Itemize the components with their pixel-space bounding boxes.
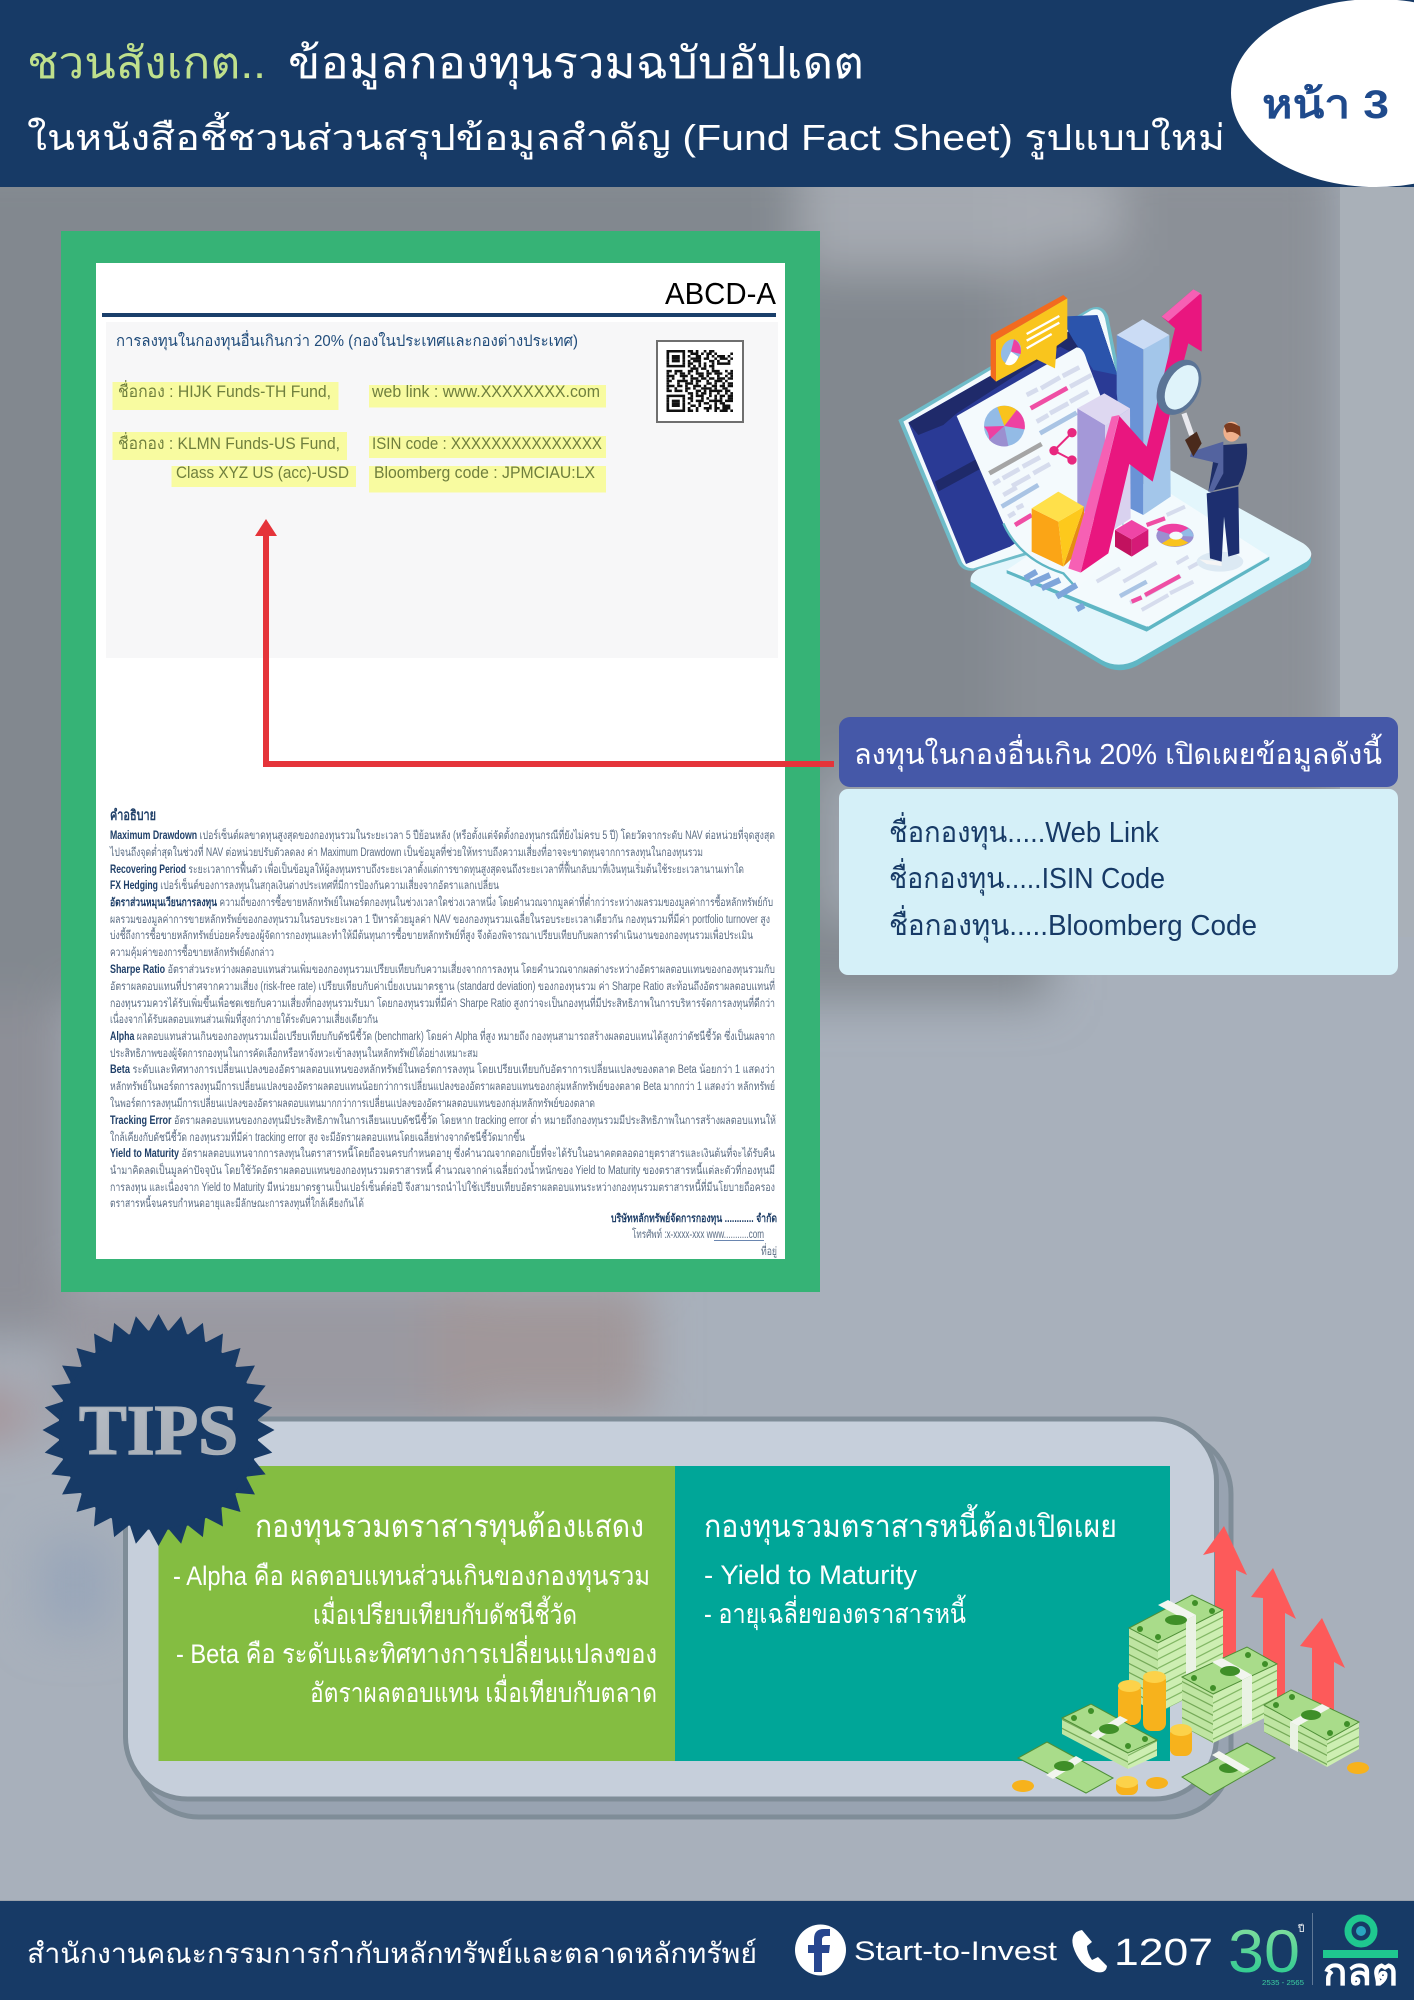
highlighted fund 2: Class XYZ US (acc)-USD	[176, 464, 349, 482]
glossary: portfolio turnover	[110, 894, 773, 959]
glossary heading: คำอธิบาย	[110, 807, 156, 824]
panel: debt funds: กองทุนรวมตราสารหนี้ต้องเปิดเผย	[704, 1504, 1117, 1546]
glossary: recovering period: Recovering Period ระยะเวลาการฟื้นตัว เพื่อเป็นข้อมูลให้ผู้ลงทุนทราบถึงระยะเวลาตั้งแต่การขาดทุนสูงสุดจนถึงระยะเวลาที่ฟื้นกลับมาที่เงินทุนเริ่มต้นใช้ระยะเวลานานเท่าใด	[110, 861, 744, 876]
header bar	[0, 0, 1414, 187]
callout: disclosure header: ลงทุนในกองอื่นเกิน 20% เปิดเผยข้อมูลดังนี้	[854, 733, 1382, 772]
disclosure heading: การลงทุนในกองทุนอื่นเกินกว่า 20% (กองในประเทศและกองต่างประเทศ)	[116, 330, 578, 351]
illustration: money and rising arrows	[1012, 1526, 1369, 1795]
icon: phone	[1072, 1930, 1107, 1972]
highlighted fund 1: ชื่อกอง : HIJK Funds-TH Fund,	[118, 380, 331, 401]
logo: 30 years: 30	[1228, 1918, 1300, 1985]
organisation name: สำนักงานคณะกรรมการกำกับหลักทรัพย์และตลาดหลักทรัพย์	[27, 1938, 757, 1969]
glossary: sharpe ratio: อัตราผลตอบแทนที่ปราศจากความเสี่ยง (risk-free rate) เปรียบเทียบกับค่าเบี่ยงเบนมาตรฐาน (standard deviation) ของกองทุนรวม ค่า Sharpe Ratio สะท้อนถึงอัตราผลตอบแทนที่	[110, 978, 775, 993]
blue bar	[1117, 319, 1171, 515]
yellow bar	[1032, 492, 1084, 567]
keyboard base	[971, 473, 1311, 670]
footer bar	[0, 1901, 1414, 2000]
title line 2: ในหนังสือชี้ชวนส่วนสรุปข้อมูลสำคัญ (Fund Fact Sheet) รูปแบบใหม่	[27, 111, 1225, 160]
curled report page	[957, 347, 1123, 588]
glossary: portfolio turnover: อัตราส่วนหมุนเวียนการลงทุน ความถี่ของการซื้อขายหลักทรัพย์ในพอร์ตกองทุนในช่วงเวลาใดช่วงเวลาหนึ่ง โดยคำนวณจากมูลค่าที่ต่ำกว่าระหว่างผลรวมของมูลค่าการซื้อหลักทรัพย์กับ	[110, 894, 773, 910]
sheet text lines	[1097, 507, 1207, 610]
panel: debt funds: - อายุเฉลี่ยของตราสารหนี้	[704, 1594, 966, 1631]
glossary: alpha: ประสิทธิภาพของผู้จัดการกองทุนในการคัดเลือกหรือหาจังหวะเข้าลงทุนในหลักทรัพย์ได้อย่างเหมาะสม	[110, 1046, 478, 1060]
glossary: portfolio turnover: ความคุ้มค่าของการซื้อขายหลักทรัพย์ดังกล่าว	[110, 944, 274, 959]
cash stack 3	[1264, 1690, 1359, 1767]
highlighted fund 2: ชื่อกอง : KLMN Funds-US Fund,	[118, 432, 340, 453]
title line 1	[27, 39, 864, 90]
highlighted fund 1	[112, 380, 606, 410]
panel: equity funds: อัตราผลตอบแทน เมื่อเทียบกับตลาด	[310, 1674, 657, 1708]
pink cube	[1115, 518, 1165, 557]
laptop screen	[898, 307, 1123, 571]
title line 1: ข้อมูลกองทุนรวมฉบับอัปเดต	[288, 39, 864, 90]
illustration: laptop with charts	[898, 289, 1311, 670]
coin stacks	[1118, 1671, 1166, 1731]
glossary: yield to maturity: การลงทุน และเนื่องจาก Yield to Maturity มีหน่วยมาตรฐานเป็นเปอร์เซ็นต์ต่อปี จึงสามารถนำไปใช้เปรียบเทียบอัตราผลตอบแทนระหว่างกองทุนรวมตราสารหนี้ที่มีนโยบายถือครอง	[110, 1179, 775, 1194]
fund code: ABCD-A	[665, 276, 776, 311]
keypad blocks	[1025, 572, 1084, 609]
businessman	[1185, 422, 1247, 572]
badge: TIPS starburst: TIPS	[79, 1392, 238, 1470]
logo: 30 years: ปี	[1297, 1923, 1304, 1935]
panel: other-fund disclosure	[106, 322, 778, 658]
document on keyboard	[1007, 557, 1269, 632]
glossary: beta	[110, 1061, 775, 1110]
glossary: maximum drawdown	[109, 827, 775, 859]
logo: SEC	[1323, 1918, 1398, 1994]
highlighted fund 2: Bloomberg code : JPMCIAU:LX	[374, 464, 595, 482]
callout: disclosure list: ชื่อกองทุน.....Web Link	[889, 812, 1159, 850]
highlighted fund 2	[112, 432, 606, 492]
hotline number: 1207	[1114, 1932, 1213, 1974]
badge: TIPS starburst	[42, 1314, 274, 1546]
glossary: yield to maturity: นำมาคิดลดเป็นมูลค่าปัจจุบัน โดยใช้วัดอัตราผลตอบแทนของกองทุนรวมตราสารหนี้ คำนวณจากค่าเฉลี่ยถ่วงน้ำหนักของ Yield to Maturity ของตราสารหนี้แต่ละตัวที่กองทุนมี	[110, 1162, 775, 1177]
panel: equity funds: - Alpha คือ ผลตอบแทนส่วนเกินของกองทุนรวม	[173, 1561, 650, 1593]
glossary: sharpe ratio	[110, 961, 775, 1026]
arrow: from callout up to disclosure	[255, 519, 834, 764]
speech bubble	[991, 295, 1067, 382]
company contact: ที่อยู่	[761, 1243, 777, 1258]
glossary: portfolio turnover: บ่งชี้ถึงการซื้อขายหลักทรัพย์บ่อยครั้งของผู้จัดการกองทุนและทำให้มีต้นทุนการซื้อขายหลักทรัพย์ที่สูง จึงต้องพิจารณาเปรียบเทียบกับผลการดำเนินงานของกองทุนรวมเพื่อประเมิน	[110, 927, 753, 942]
glossary: maximum drawdown: Maximum Drawdown เปอร์เซ็นต์ผลขาดทุนสูงสุดของกองทุนรวมในระยะเวลา 5 ปีย้อนหลัง (หรือตั้งแต่จัดตั้งกองทุนกรณีที่ยังไม่ครบ 5 ปี) โดยวัดจากระดับ NAV ต่อหน่วยที่จุดสูงสุด	[110, 827, 775, 842]
callout: disclosure header	[839, 717, 1398, 787]
logo: SEC: กลต	[1323, 1952, 1398, 1994]
red arrows	[1203, 1526, 1345, 1720]
network icon	[1054, 433, 1072, 460]
callout: disclosure list	[839, 789, 1398, 975]
panel: equity funds	[158, 1466, 676, 1761]
glossary: beta: Beta ระดับและทิศทางการเปลี่ยนแปลงของอัตราผลตอบแทนของหลักทรัพย์ในพอร์ตการลงทุน โดยเปรียบเทียบกับอัตราการเปลี่ยนแปลงของตลาด Beta น้อยกว่า 1 แสดงว่า	[110, 1061, 775, 1076]
flat bills	[1018, 1742, 1275, 1795]
facebook page name: Start-to-Invest	[854, 1936, 1058, 1966]
logo: 30 years: 2535 - 2565	[1262, 1980, 1304, 1987]
glossary: yield to maturity: ตราสารหนี้จนครบกำหนดอายุและมีลักษณะการลงทุนที่ใกล้เคียงกันได้	[110, 1195, 364, 1210]
donut chart	[1156, 524, 1194, 547]
loose coins	[1012, 1724, 1369, 1795]
glossary: portfolio turnover: ผลรวมของมูลค่าการขายหลักทรัพย์ของกองทุนรวมในรอบระยะเวลา 1 ปีหารด้วยมูลค่า NAV ของกองทุนรวมเฉลี่ยในรอบระยะเวลาเดียวกัน กองทุนรวมที่มีค่า portfolio turnover สูง	[110, 911, 770, 926]
magnifying glass	[1148, 352, 1210, 435]
cash stack 2	[1182, 1647, 1277, 1743]
glossary: tracking error: Tracking Error อัตราผลตอบแทนของกองทุนมีประสิทธิภาพในการเลียนแบบดัชนีชี้วัด โดยหาก tracking error ต่ำ หมายถึงกองทุนรวมมีประสิทธิภาพในการสร้างผลตอบแทนให้	[110, 1112, 776, 1127]
glossary: sharpe ratio: กองทุนรวมควรได้รับเพิ่มขึ้นเพื่อชดเชยกับความเสี่ยงที่กองทุนรวมรับมา โดยกองทุนรวมที่มีค่า Sharpe Ratio สูงกว่าจะเป็นกองทุนที่มีประสิทธิภาพในการบริหารจัดการลงทุนที่ดีกว่า	[110, 995, 775, 1010]
panel: tips tablet	[126, 1419, 1231, 1817]
glossary: yield to maturity	[110, 1145, 775, 1210]
rising pink arrow	[1068, 289, 1202, 573]
highlighted fund 2: ISIN code : XXXXXXXXXXXXXXX	[372, 435, 602, 453]
glossary: beta: หลักทรัพย์ในพอร์ตการลงทุนมีการเปลี่ยนแปลงของอัตราผลตอบแทนน้อยกว่าการเปลี่ยนแปลงของอัตราผลตอบแทนของกลุ่มหลักทรัพย์ของตลาด Beta มากกว่า 1 แสดงว่า หลักทรัพย์	[110, 1078, 775, 1093]
company contact: บริษัทหลักทรัพย์จัดการกองทุน ............ จำกัด	[611, 1211, 777, 1226]
page badge: หน้า 3	[1262, 83, 1389, 127]
panel: debt funds: - Yield to Maturity	[704, 1560, 918, 1590]
glossary: alpha	[110, 1028, 775, 1060]
glossary: yield to maturity: Yield to Maturity อัตราผลตอบแทนจากการลงทุนในตราสารหนี้โดยถือจนครบกำหนดอายุ ซึ่งคำนวณจากดอกเบี้ยที่จะได้รับในอนาคตตลอดอายุตราสารและเงินต้นที่จะได้รับคืน	[110, 1145, 775, 1160]
icon: QR code	[657, 341, 743, 422]
highlighted fund 1: web link : www.XXXXXXXX.com	[371, 383, 600, 401]
panel: equity funds: กองทุนรวมตราสารทุนต้องแสดง	[255, 1509, 644, 1546]
glossary: alpha: Alpha ผลตอบแทนส่วนเกินของกองทุนรวมเมื่อเปรียบเทียบกับดัชนีชี้วัด (benchmark) โดยค่า Alpha ที่สูง หมายถึง กองทุนสามารถสร้างผลตอบแทนได้สูงกว่าดัชนีชี้วัด ซึ่งเป็นผลจาก	[110, 1028, 775, 1043]
report lines	[989, 367, 1092, 525]
glossary: tracking error: ใกล้เคียงกับดัชนีชี้วัด กองทุนรวมที่มีค่า tracking error สูง จะมีอัตราผลตอบแทนโดยเฉลี่ยห่างจากดัชนีชี้วัดมากขึ้น	[110, 1129, 525, 1144]
glossary: FX hedging: FX Hedging เปอร์เซ็นต์ของการลงทุนในสกุลเงินต่างประเทศที่มีการป้องกันความเสี่ยงจากอัตราแลกเปลี่ยน	[110, 877, 499, 892]
panel: equity funds: - Beta คือ ระดับและทิศทางการเปลี่ยนแปลงของ	[176, 1635, 657, 1669]
glossary	[109, 807, 777, 1258]
cash stack 1	[1129, 1595, 1223, 1713]
panel: equity funds: เมื่อเปรียบเทียบกับดัชนีชี้วัด	[313, 1595, 577, 1630]
glossary: beta: ในพอร์ตการลงทุนมีการเปลี่ยนแปลงของอัตราผลตอบแทนมากกว่าการเปลี่ยนแปลงของอัตราผลตอบแทนของกลุ่มหลักทรัพย์ของตลาด	[110, 1095, 595, 1110]
company contact: โทรศัพท์ :x-xxxx-xxx www...........com	[632, 1227, 764, 1241]
title line 1: ชวนสังเกต..	[27, 39, 266, 88]
pie chart	[984, 406, 1025, 446]
page badge	[1231, 0, 1414, 187]
icon: facebook	[795, 1924, 846, 1976]
glossary: tracking error	[110, 1112, 776, 1144]
glossary: sharpe ratio: เนื่องจากได้รับผลตอบแทนส่วนเพิ่มที่สูงกว่าภายใต้ระดับความเสี่ยงเดียวกัน	[110, 1011, 378, 1026]
glossary: maximum drawdown: ไปจนถึงจุดต่ำสุดในช่วงที่ NAV ต่อหน่วยปรับตัวลดลง ค่า Maximum Drawdown เป็นข้อมูลที่ช่วยให้ทราบถึงความเสี่ยงที่อาจจะขาดทุนจากการลงทุนในกองทุนรวม	[109, 844, 703, 859]
glossary: sharpe ratio: Sharpe Ratio อัตราส่วนระหว่างผลตอบแทนส่วนเพิ่มของกองทุนรวมเปรียบเทียบกับความเสี่ยงจากการลงทุน โดยคำนวณจากผลต่างระหว่างอัตราผลตอบแทนของกองทุนรวมกับ	[110, 961, 775, 976]
callout: disclosure list: ชื่อกองทุน.....ISIN Code	[889, 858, 1165, 896]
company contact	[611, 1211, 777, 1258]
panel: fund fact sheet	[61, 231, 820, 1292]
callout: disclosure list: ชื่อกองทุน.....Bloomberg Code	[889, 905, 1257, 943]
panel: debt funds	[675, 1466, 1170, 1761]
cash stack 4	[1062, 1704, 1157, 1769]
purple bar	[1077, 393, 1131, 530]
